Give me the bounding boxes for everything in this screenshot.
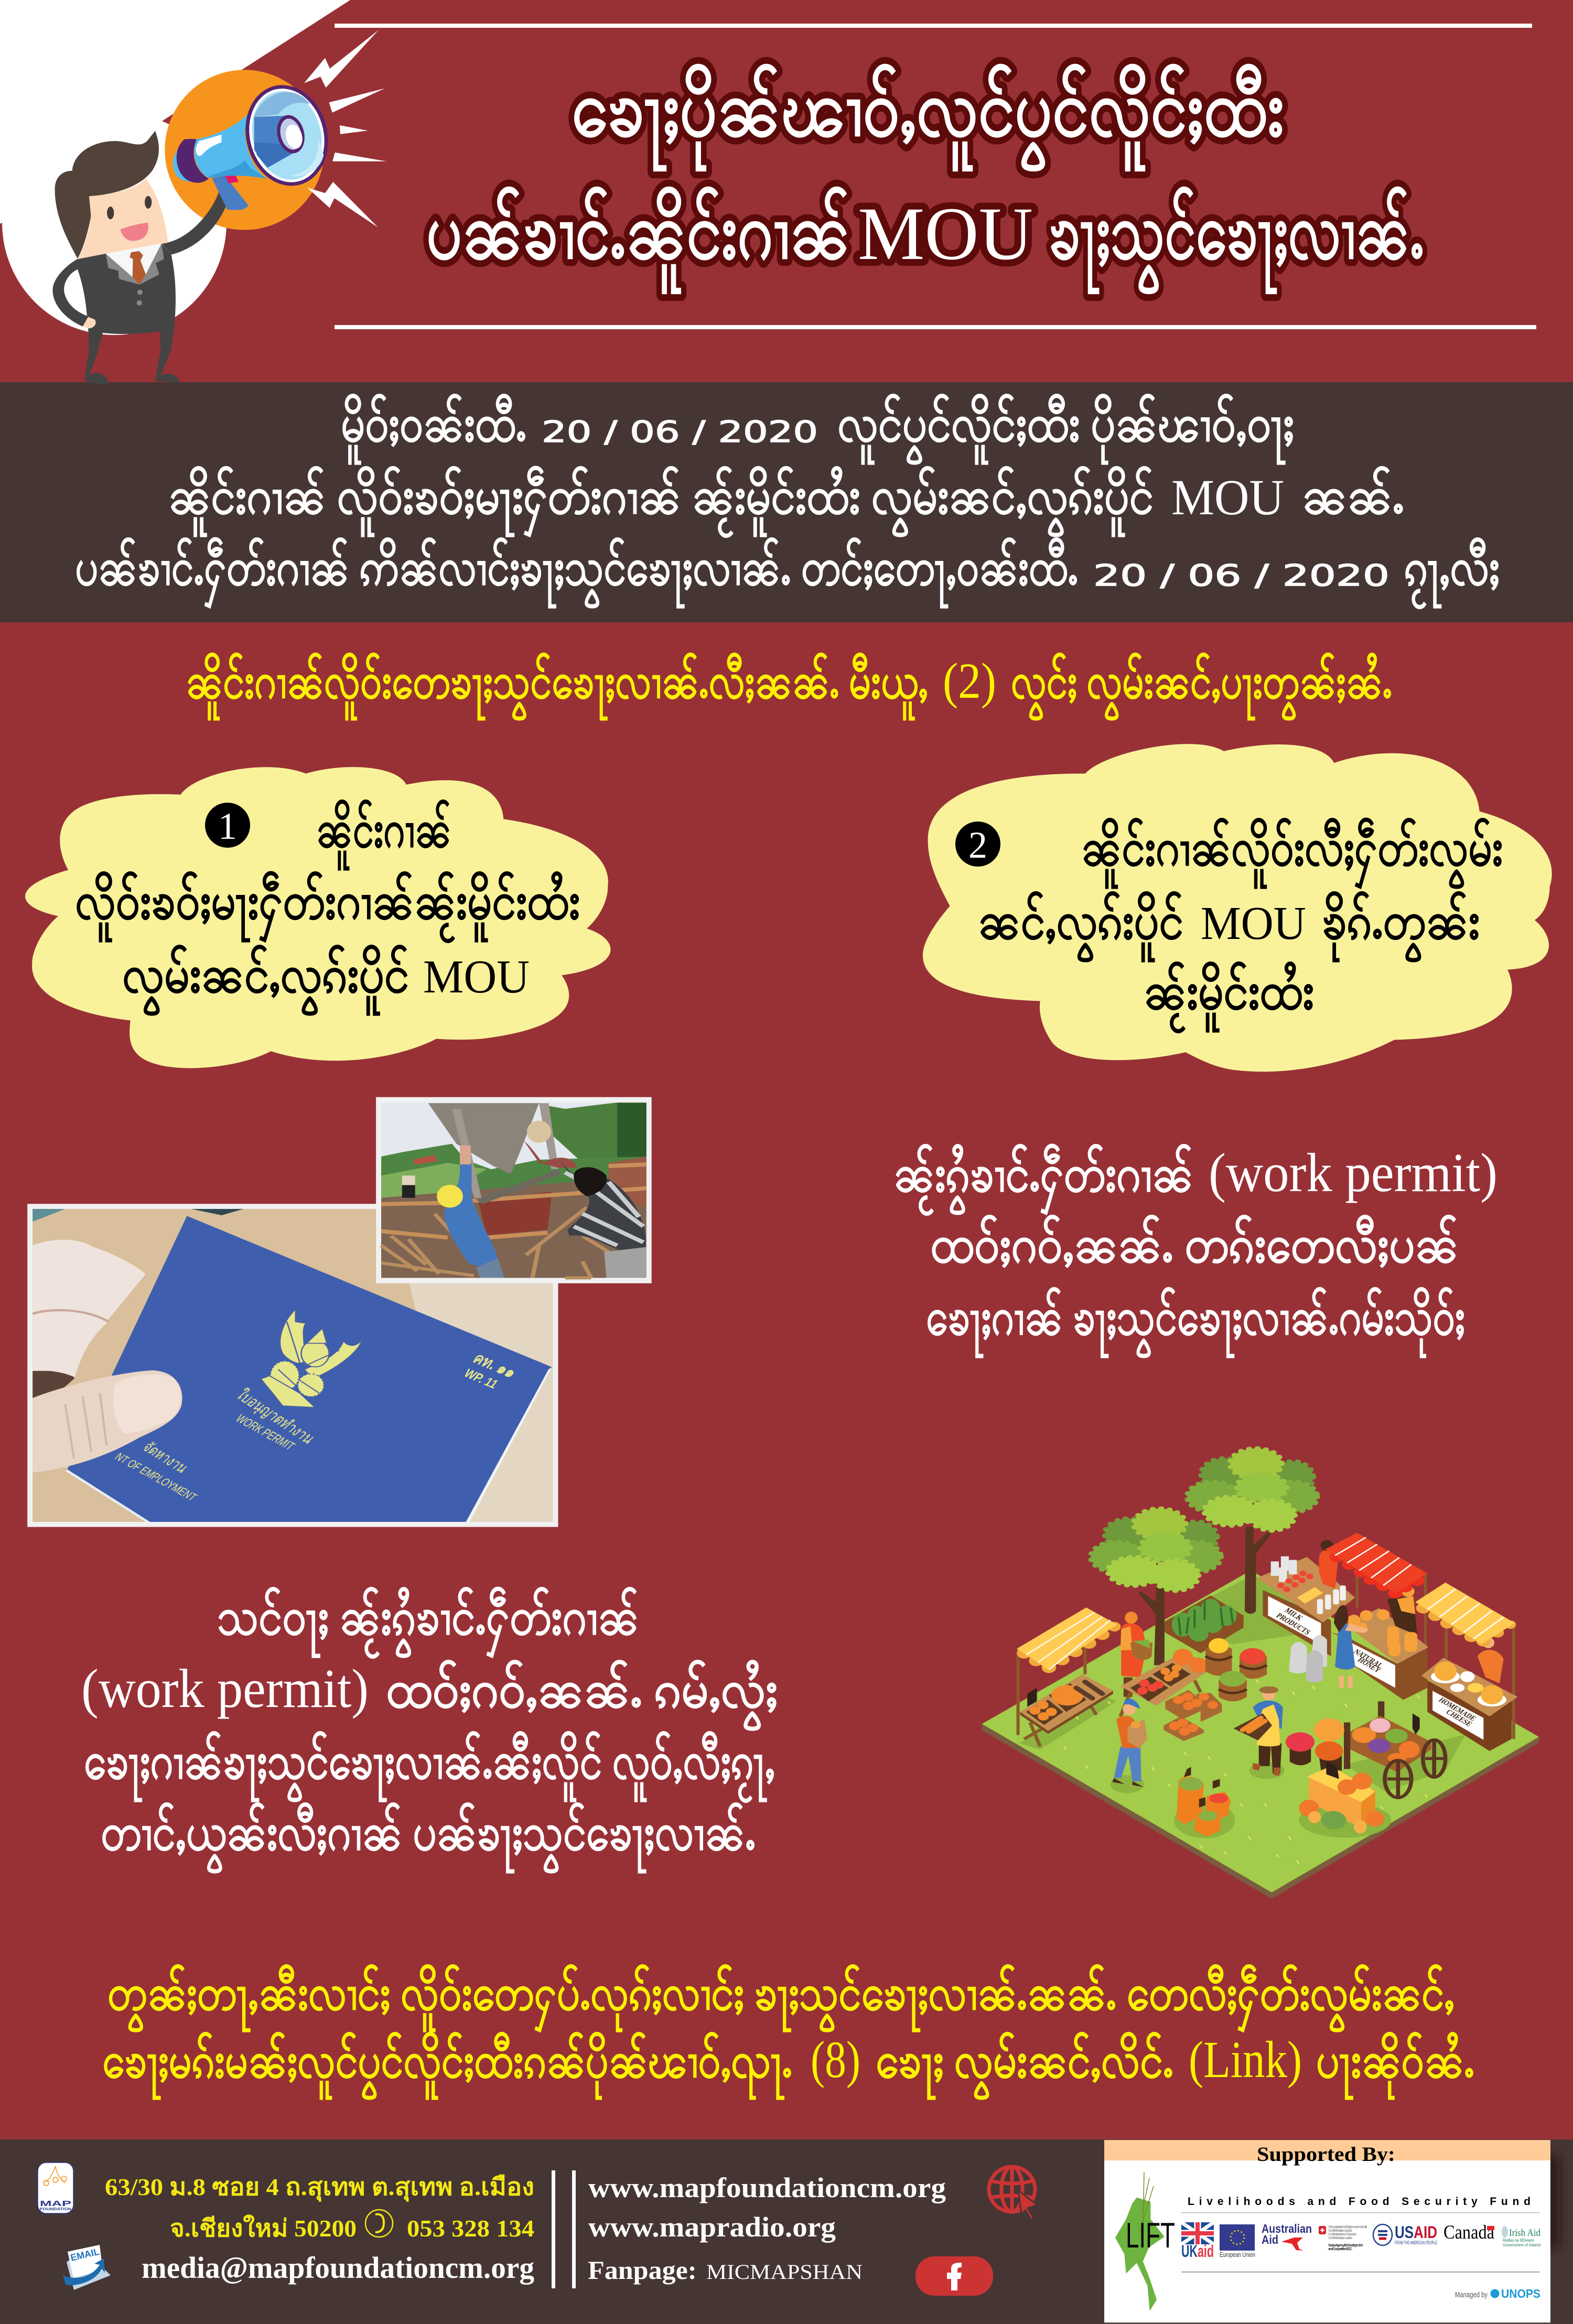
woman in blue dress	[1334, 1605, 1369, 1688]
illustration: farmers market	[982, 1449, 1539, 1899]
text: work permit right: (work permit)	[1209, 1142, 1497, 1203]
footer: websites: www.mapfoundationcm.org	[588, 2172, 946, 2203]
milk products stall: MILK	[1283, 1606, 1305, 1622]
panel: supporters	[1104, 2140, 1560, 2323]
panel: cloud 2: ၼႂ်းမိူင်းထႆး	[1144, 961, 1314, 1034]
logo: managed by UNOPS: Managed by	[1455, 2290, 1488, 2299]
logo: Irish Aid: Rialtas na hÉireann	[1503, 2238, 1534, 2243]
dark announcement band: MOU	[1171, 469, 1284, 525]
logo: Swiss agency: Schweizerische Eidgenossenschaft	[1328, 2225, 1367, 2229]
logo: Australian Aid: Australian	[1262, 2222, 1312, 2235]
milk products stall	[1257, 1540, 1355, 1656]
text: work permit right: ထဝ်ႈဂဝ်ႇၼၼ်ႉ တၵ်းတေလီႈပၼ်	[930, 1214, 1459, 1273]
panel: cloud 1: MOU	[423, 951, 530, 1003]
produce cart	[1344, 1701, 1446, 1798]
man	[52, 131, 226, 384]
address line 2: จ.เชียงใหม่ 50200	[170, 2214, 357, 2242]
yellow closing text: ပႃးၼိုဝ်ၼႆႉ	[1316, 2031, 1474, 2100]
logo: UK aid: UKaid	[1181, 2242, 1214, 2261]
hand	[33, 1240, 182, 1473]
text: work permit left: တၢင်ႇယွၼ်းလီႈဂၢၼ် ပၼ်ၶႃႈသွင်ၶေႃႈလၢၼ်ႉ	[101, 1802, 756, 1874]
logo: Canada: Canada	[1443, 2222, 1494, 2243]
icon: megaphone	[173, 78, 338, 210]
panel: cloud 2	[923, 744, 1552, 1072]
logo: managed by UNOPS	[1455, 2287, 1540, 2300]
panel: cloud 1: ၼိူင်းဂၢၼ်	[316, 799, 451, 871]
text: work permit left: (work permit)	[81, 1658, 369, 1719]
logo: LIFT map: LIFT	[1126, 2215, 1175, 2255]
footer divider	[552, 2170, 576, 2288]
stall: bread	[1017, 1607, 1121, 1746]
dark announcement band: ၵႂႃႇလီႈ	[1404, 537, 1500, 610]
dark announcement band: လူင်ပွင်လိူင်ႈထီး ပိုၼ်ၽၢဝ်ႇဝႃႈ	[837, 393, 1294, 465]
icon: MAP Foundation logo: MAP	[40, 2199, 71, 2208]
icon: email: EMAIL	[69, 2246, 100, 2263]
icon: globe with cursor	[989, 2167, 1037, 2219]
icon: email	[63, 2245, 111, 2290]
photo: work permit booklet: คท. ๑๑	[469, 1350, 521, 1381]
honey stall: NATURAL	[1352, 1648, 1385, 1670]
yellow closing text	[102, 1964, 1474, 2100]
title: ၶေႃႈပိုၼ်ၽၢဝ်ႇလူင်ပွင်လိူင်ႈထီး	[572, 63, 1284, 172]
photos	[27, 1097, 652, 1527]
dark announcement band: ၼၼ်ႉ	[1302, 466, 1404, 525]
logo: Australian Aid	[1262, 2222, 1312, 2251]
text: work permit left	[81, 1586, 778, 1874]
header top rule	[335, 24, 1532, 28]
dark announcement band: 20 / 06 / 2020	[542, 415, 818, 449]
logo: LIFT map	[1115, 2172, 1175, 2311]
white header shape	[0, 0, 350, 335]
logo: USAID: USAID	[1395, 2223, 1437, 2242]
logo: Swiss agency: Confederazione Svizzera	[1328, 2233, 1356, 2236]
crates of oranges	[1163, 1690, 1222, 1741]
logo: UK aid	[1181, 2222, 1214, 2261]
photo: work permit booklet: NT OF EMPLOYMENT	[112, 1451, 200, 1504]
man with paper bag	[1112, 1699, 1147, 1787]
text: work permit right	[893, 1142, 1497, 1358]
illustration: businessman with megaphone	[52, 30, 386, 384]
yellow closing text: ၶေႃႈမၵ်းမၼ်ႈလူင်ပွင်လိူင်ႈထီးၵၼ်ပိုၼ်ၽၢဝ်ႇၺႃႉ	[102, 2032, 792, 2100]
cheese stall	[1415, 1583, 1517, 1751]
subheading: ၼိူင်းဂၢၼ်လိူဝ်းတေၶႃႈသွင်ၶေႃႈလၢၼ်ႉလီႈၼၼ်ႉ မီးယူႇ	[186, 653, 928, 721]
hay bale with pumpkins	[1299, 1761, 1384, 1833]
subheading: (2)	[943, 653, 996, 709]
icon: phone	[365, 2210, 393, 2237]
icon: orange circle	[165, 70, 324, 230]
logo: Australian Aid: Aid	[1262, 2233, 1278, 2246]
dark announcement band: ၼိူင်းဂၢၼ် လိူဝ်းၶဝ်ႈမႃးႁဵတ်းဂၢၼ် ၼႂ်းမိူင်းထႆး လွမ်းၼင်ႇလွၵ်းပိူင်	[168, 466, 1154, 538]
footer: address and contacts	[38, 2163, 534, 2290]
yellow closing text: (8)	[811, 2030, 860, 2089]
logo: European Union: European Union	[1220, 2251, 1255, 2258]
milk cans	[1289, 1635, 1327, 1682]
logo: Irish Aid: Government of Ireland	[1503, 2243, 1540, 2247]
panel: cloud 2: 2	[968, 824, 987, 866]
photo: work permit booklet: WORK PERMIT	[233, 1412, 298, 1453]
panel: cloud 1: လွမ်းၼင်ႇလွၵ်းပိူင်	[122, 944, 409, 1016]
phone number: 053 328 134	[407, 2215, 534, 2242]
logo: Swiss agency	[1319, 2225, 1367, 2251]
logo: Swiss agency: Confederaziun svizra	[1328, 2236, 1352, 2240]
logo: Swiss agency: and Cooperation SDC	[1328, 2247, 1352, 2251]
logo: Swiss agency: Confédération suisse	[1328, 2229, 1352, 2233]
dark announcement band: ပၼ်ၶၢင်ႉႁဵတ်းဂၢၼ် ဢိၼ်လၢင်ႈၶႃႈသွင်ၶေႃႈလၢၼ်ႉ တင်ႈတေႃႇဝၼ်းထီႉ	[75, 537, 1078, 609]
panel: cloud 2: MOU	[1201, 898, 1306, 949]
woman with basket	[1121, 1612, 1152, 1697]
footer band	[0, 2139, 1573, 2324]
yellow closing text: ၶေႃႈ လွမ်းၼင်ႇလိင်ႉ	[876, 2032, 1173, 2100]
footer: websites	[588, 2172, 946, 2285]
tree back	[1188, 1449, 1317, 1614]
milk products stall: PRODUCTS	[1274, 1612, 1312, 1636]
text: work permit left: ထဝ်ႈဂဝ်ႇၼၼ်ႉ ၵမ်ႇလွႆႈ	[386, 1659, 778, 1731]
photo: work permit booklet: ใบอนุญาตทำงาน	[231, 1387, 319, 1447]
panel: cloud 1: လိူဝ်းၶဝ်ႈမႃးႁဵတ်းဂၢၼ်ၼႂ်းမိူင်းထႆး	[75, 871, 580, 944]
panel: cloud 1: 1	[218, 805, 237, 847]
panel: cloud 2: ၼင်ႇလွၵ်းပိူင်	[978, 891, 1183, 963]
panel: cloud 1	[25, 767, 611, 1068]
logo: European Union	[1220, 2224, 1255, 2258]
photo: work permit booklet: จัดหางาน	[138, 1439, 192, 1476]
yellow closing text: (Link)	[1189, 2030, 1302, 2089]
title: ပၼ်ၶၢင်ႉၼိူင်းဂၢၼ်	[426, 186, 850, 295]
produce table	[1121, 1649, 1219, 1716]
footer: websites: MICMAPSHAN	[706, 2260, 863, 2284]
tree front	[1091, 1509, 1221, 1665]
footer: websites: www.mapradio.org	[588, 2211, 836, 2243]
ground	[982, 1571, 1539, 1899]
footer: websites: Fanpage:	[588, 2255, 697, 2285]
photo: construction workers	[376, 1097, 652, 1283]
text: work permit left: သင်ဝႃႈ ၼႂ်းၵွႆၶၢင်ႉႁဵတ်းဂၢၼ်	[217, 1586, 639, 1659]
subheading: လွင်ႈ လွမ်းၼင်ႇပႃးတွၼ်ႈၼႆႉ	[1011, 652, 1392, 721]
logo: Irish Aid: Irish Aid	[1509, 2228, 1540, 2239]
logo: USAID: FROM THE AMERICAN PEOPLE	[1395, 2240, 1437, 2245]
barrels	[1205, 1638, 1267, 1701]
logo: USAID	[1373, 2223, 1437, 2245]
panel: cloud 2: ၶိုၵ်ႉတွၼ်း	[1322, 891, 1480, 963]
dark announcement band: 20 / 06 / 2020	[1093, 559, 1389, 593]
address line 1: 63/30 ม.8 ซอย 4 ถ.สุเทพ ต.สุเทพ อ.เมือง	[105, 2174, 534, 2202]
honey stall: HONEY	[1355, 1656, 1383, 1674]
fund name: Livelihoods and Food Security Fund	[1188, 2196, 1531, 2208]
subheading	[186, 652, 1392, 721]
photo: work permit booklet	[27, 1204, 558, 1527]
flower pots	[1286, 1718, 1344, 1770]
cheese stall: HOMEMADE	[1437, 1696, 1478, 1723]
dark announcement band: မိူဝ်ႈဝၼ်းထီႉ	[341, 393, 526, 465]
logo: managed by UNOPS: UNOPS	[1501, 2287, 1540, 2300]
text: work permit right: ၼႂ်းၵွႆၶၢင်ႉႁဵတ်းဂၢၼ်	[893, 1143, 1193, 1216]
dark announcement band	[0, 382, 1573, 622]
header bottom rule	[335, 325, 1536, 329]
icon: sound bolts	[304, 30, 386, 228]
icon: garuda emblem	[261, 1309, 363, 1408]
title: MOU	[858, 192, 1033, 276]
title	[426, 63, 1424, 295]
sacks of grain	[1177, 1767, 1231, 1837]
crate of watermelons	[1165, 1595, 1244, 1653]
logo: Swiss agency: Swiss Agency for Development	[1328, 2244, 1363, 2247]
email address: media@mapfoundationcm.org	[142, 2251, 534, 2285]
logo: Irish Aid	[1502, 2226, 1540, 2247]
photo: work permit booklet: WP. 11	[461, 1366, 501, 1391]
icon: MAP Foundation logo: FOUNDATION	[40, 2208, 71, 2211]
man with apron	[1234, 1687, 1283, 1776]
heading: supported by: Supported By:	[1257, 2143, 1395, 2166]
honey stall	[1325, 1533, 1428, 1700]
cheese stall: CHEESE	[1444, 1708, 1474, 1728]
title: ၶႃႈသွင်ၶေႃႈလၢၼ်ႉ	[1049, 186, 1424, 295]
text: work permit left: ၶေႃႈဂၢၼ်ၶႃႈသွင်ၶေႃႈလၢၼ်ႉၼီႈလိူင် လူဝ်ႇလီႈၵႂႃႇ	[84, 1731, 775, 1803]
icon: MAP Foundation logo	[38, 2163, 73, 2213]
icon: facebook	[915, 2256, 993, 2296]
